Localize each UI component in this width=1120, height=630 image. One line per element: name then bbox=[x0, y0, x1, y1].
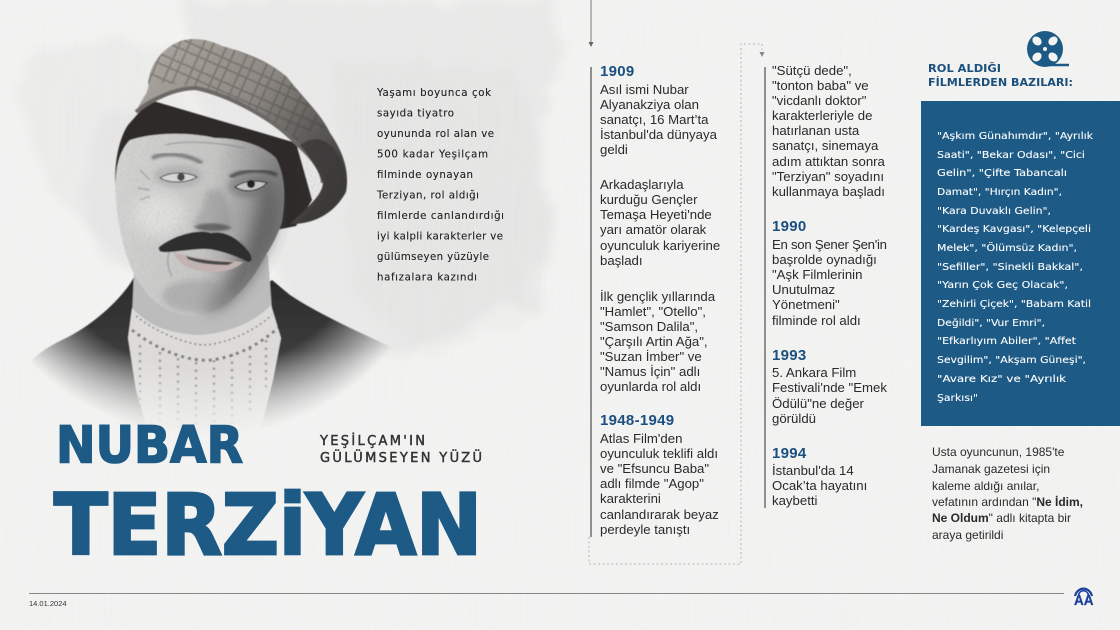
stubble bbox=[161, 279, 216, 313]
year 1909: Asıl ismi Nubar bbox=[600, 82, 689, 97]
panel: film list: Değildi", "Vur Emri", bbox=[937, 317, 1045, 329]
year 1990: başrolde oynadığı bbox=[772, 252, 877, 267]
early plays: İlk gençlik yıllarında bbox=[600, 289, 716, 304]
skin grain bbox=[120, 136, 213, 271]
note: memoir: Ne Oldum" adlı kitapta bir bbox=[932, 511, 1071, 525]
arrow: dashed connector between columns bbox=[589, 44, 764, 564]
nicknames: "Terziyan" soyadını bbox=[772, 169, 884, 184]
note: memoir bbox=[932, 445, 1083, 542]
nicknames bbox=[772, 63, 886, 199]
neck bbox=[132, 255, 272, 345]
note: memoir: araya getirildi bbox=[932, 528, 1003, 542]
early plays: oyunlarda rol aldı bbox=[600, 379, 701, 394]
note: memoir: vefatının ardından "Ne İdim, bbox=[932, 494, 1083, 509]
panel: film list: Gelin", "Çifte Tabancalı bbox=[937, 168, 1067, 179]
theatre group: Temaşa Heyeti'nde bbox=[600, 207, 712, 222]
year 1948-1949: adlı filmde "Agop" bbox=[600, 476, 704, 491]
panel: film list: "Yarın Çok Geç Olacak", bbox=[937, 280, 1068, 291]
year 1990: Yönetmeni" bbox=[772, 297, 840, 312]
footer rule bbox=[29, 592, 1064, 594]
year 1909 bbox=[600, 63, 718, 157]
eye right bbox=[228, 174, 272, 198]
year 1948-1949: oyunculuk teklifi aldı bbox=[600, 446, 718, 461]
year 1990: filminde rol aldı bbox=[772, 313, 861, 328]
early plays: "Namus İçin" adlı bbox=[600, 364, 700, 379]
year 1909: İstanbul'da dünyaya bbox=[600, 127, 718, 142]
nicknames: hatırlanan usta bbox=[772, 123, 860, 138]
year 1909: geldi bbox=[600, 142, 628, 157]
panel: film list: "Efkarlıyım Abiler", "Affet bbox=[937, 336, 1076, 347]
year 1990: En son Şener Şen'in bbox=[772, 237, 887, 252]
hair behind face bbox=[115, 100, 312, 230]
intro paragraph: filmlerde canlandırdığı bbox=[377, 210, 504, 222]
intro paragraph: filminde oynayan bbox=[377, 170, 473, 181]
flat cap bbox=[136, 39, 347, 224]
jacket bbox=[32, 277, 390, 423]
nicknames: "tonton baba" ve bbox=[772, 78, 869, 93]
panel: film list: Melek", "Ölümsüz Kadın", bbox=[937, 241, 1077, 254]
year 1948-1949: perdeyle tanıştı bbox=[600, 522, 690, 537]
year 1993: Ödülü"ne değer bbox=[772, 396, 865, 411]
panel: film list: "Zehirli Çiçek", "Babam Katil bbox=[937, 299, 1091, 310]
title: TERZİYAN: TERZiYAN bbox=[54, 476, 482, 574]
year 1948-1949: ve "Efsuncu Baba" bbox=[600, 461, 709, 476]
nicknames: karakterleriyle de bbox=[772, 108, 872, 123]
embroidered shirt bbox=[128, 305, 281, 440]
year 1994: kaybetti bbox=[772, 493, 818, 508]
panel: film list: Şarkısı" bbox=[937, 393, 978, 404]
note: memoir: Usta oyuncunun, 1985'te bbox=[932, 445, 1065, 459]
icon: film reel bbox=[1027, 31, 1069, 67]
intro paragraph: 500 kadar Yeşilçam bbox=[377, 150, 488, 160]
theatre group: başladı bbox=[600, 253, 643, 268]
year 1990 bbox=[772, 218, 887, 328]
year 1994: 1994 bbox=[772, 445, 807, 462]
timeline column 2 bbox=[765, 63, 887, 508]
mouth bbox=[173, 252, 243, 272]
year 1990: 1990 bbox=[772, 218, 807, 235]
intro paragraph: Yaşamı boyunca çok bbox=[376, 88, 491, 99]
year 1993 bbox=[772, 347, 887, 426]
panel: film list: Saati", "Bekar Odası", "Cici bbox=[937, 150, 1085, 161]
year 1909: sanatçı, 16 Mart’ta bbox=[600, 112, 709, 127]
panel: film list: Sevgilim", "Akşam Güneşi", bbox=[937, 355, 1086, 366]
year 1990: "Aşk Filmlerinin bbox=[772, 267, 862, 282]
logo: AA: AA bbox=[1074, 592, 1094, 609]
early plays: "Çarşılı Artin Ağa", bbox=[600, 334, 708, 349]
nicknames: adım attıktan sonra bbox=[772, 154, 886, 169]
theatre group: yarı amatör olarak bbox=[600, 222, 707, 237]
year 1993: 5. Ankara Film bbox=[772, 365, 856, 380]
face bbox=[116, 134, 284, 316]
wrinkles bbox=[138, 142, 250, 282]
early plays: "Hamlet", "Otello", bbox=[600, 304, 706, 319]
intro paragraph: hafızalara kazındı bbox=[377, 272, 477, 284]
panel: film list: "Kardeş Kavgası", "Kelepçeli bbox=[937, 224, 1091, 235]
year 1994: İstanbul'da 14 bbox=[772, 463, 854, 478]
theatre group: oyunculuk kariyerine bbox=[600, 238, 720, 253]
intro paragraph: oyununda rol alan ve bbox=[377, 129, 494, 140]
intro paragraph bbox=[376, 88, 504, 284]
watercolor wash bbox=[10, 0, 560, 360]
year 1994 bbox=[772, 445, 867, 508]
year 1990: Unutulmaz bbox=[772, 282, 835, 297]
year 1948-1949: canlandırarak beyaz bbox=[600, 507, 719, 522]
year 1948-1949: 1948-1949 bbox=[600, 412, 674, 429]
panel: film list: "Aşkım Günahımdır", "Ayrılık bbox=[937, 131, 1093, 142]
panel: film list: "Kara Duvaklı Gelin", bbox=[937, 206, 1051, 217]
intro paragraph: gülümseyen yüzüyle bbox=[377, 252, 489, 263]
portrait of Nubar Terziyan bbox=[30, 39, 398, 440]
moustache bbox=[159, 232, 252, 262]
panel: film list bbox=[921, 101, 1120, 426]
nicknames: "vicdanlı doktor" bbox=[772, 93, 867, 108]
heading: films bbox=[928, 62, 1073, 89]
year 1948-1949 bbox=[600, 412, 719, 537]
year 1909: 1909 bbox=[600, 63, 635, 80]
year 1993: 1993 bbox=[772, 347, 807, 364]
year 1948-1949: Atlas Film'den bbox=[600, 431, 682, 446]
eye left bbox=[154, 165, 202, 187]
arrow: timeline start bbox=[588, 0, 594, 47]
nicknames: sanatçı, sinemaya bbox=[772, 138, 879, 153]
heading: films: FİLMLERDEN BAZILARI: bbox=[928, 75, 1073, 89]
nicknames: kullanmaya başladı bbox=[772, 184, 885, 199]
year 1993: Festivali'nde "Emek bbox=[772, 380, 887, 395]
title: NUBAR: NUBAR bbox=[56, 416, 243, 476]
early plays bbox=[600, 289, 716, 394]
timeline column 1 bbox=[591, 63, 720, 537]
early plays: "Samson Dalila", bbox=[600, 319, 698, 334]
panel: film list: "Avare Kız" ve "Ayrılık bbox=[937, 374, 1066, 385]
subtitle: YEŞİLÇAM'IN bbox=[319, 433, 425, 449]
year 1909: Alyanakziya olan bbox=[600, 97, 699, 112]
year 1994: Ocak’ta hayatını bbox=[772, 478, 867, 493]
panel: film list: "Sefiller", "Sinekli Bakkal", bbox=[937, 262, 1083, 273]
theatre group: Arkadaşlarıyla bbox=[600, 177, 684, 192]
panel: film list: Damat", "Hırçın Kadın", bbox=[937, 187, 1062, 198]
subtitle bbox=[319, 433, 482, 466]
nicknames: "Sütçü dede", bbox=[772, 63, 852, 78]
theatre group: kurduğu Gençler bbox=[600, 192, 698, 207]
intro paragraph: Terziyan, rol aldığı bbox=[376, 190, 479, 202]
nose shadow bbox=[193, 190, 232, 234]
early plays: "Suzan İmber" ve bbox=[600, 349, 702, 364]
intro paragraph: sayıda tiyatro bbox=[377, 108, 454, 120]
date: 14.01.2024 bbox=[29, 599, 67, 608]
theatre group bbox=[600, 177, 720, 268]
note: memoir: kaleme aldığı anılar, bbox=[932, 479, 1039, 493]
note: memoir: Jamanak gazetesi için bbox=[932, 462, 1050, 476]
year 1993: görüldü bbox=[772, 411, 816, 426]
subtitle: GÜLÜMSEYEN YÜZÜ bbox=[320, 449, 482, 466]
year 1948-1949: karakterini bbox=[600, 491, 661, 506]
heading: films: ROL ALDIĞI bbox=[928, 62, 1001, 75]
intro paragraph: iyi kalpli karakterler ve bbox=[377, 232, 503, 242]
